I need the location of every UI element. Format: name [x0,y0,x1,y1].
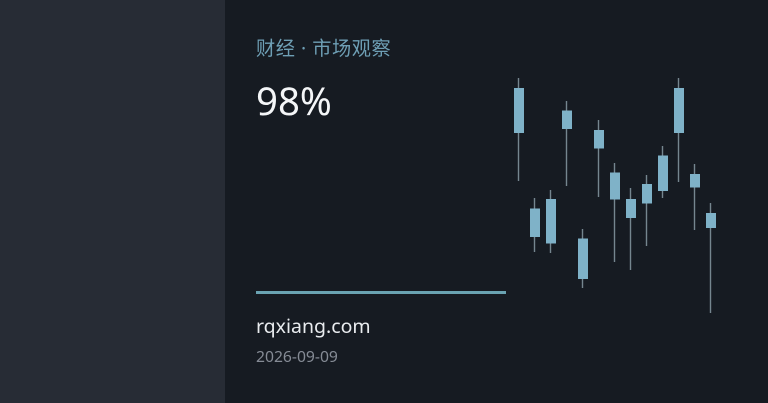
headline number: 98% [256,75,332,127]
panel: left sidebar [0,0,225,403]
site name: rqxiang.com [256,312,371,339]
date: 2026-09-09 [256,345,338,367]
heading: category: 财经 · 市场观察 [256,34,391,61]
accent rule [256,291,506,294]
